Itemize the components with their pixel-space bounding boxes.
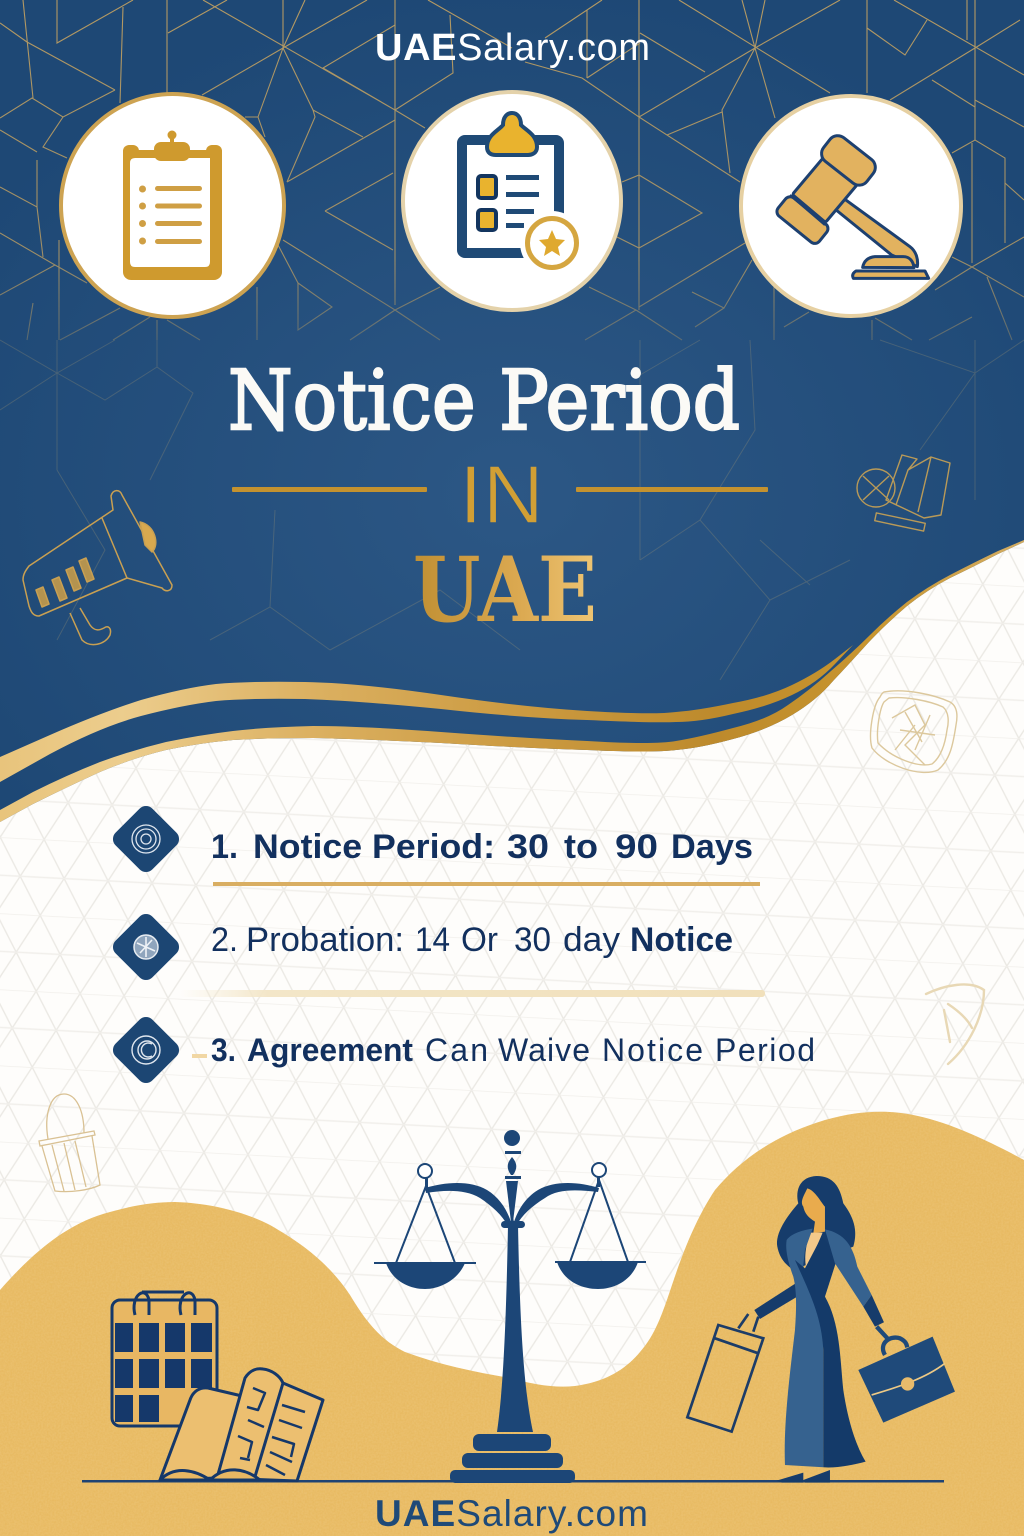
text: agreement: Period [715, 1032, 815, 1068]
right sleeve [825, 1229, 872, 1307]
text: probation: Notice [630, 921, 733, 959]
icon: diamond badge 3 [109, 1013, 183, 1087]
title word: UAE: UAE [413, 537, 597, 643]
icon: checklist clipboard with star badge [403, 92, 621, 310]
text: probation: 14 [415, 921, 450, 959]
right cuff [863, 1295, 884, 1327]
icon: balance scale [374, 1130, 646, 1483]
ground line [82, 1480, 944, 1482]
coat light panel [785, 1229, 823, 1467]
right shoe [777, 1473, 803, 1483]
text: probation: Probation: [246, 921, 404, 959]
top site name: UAESalary.com [375, 27, 650, 69]
icon: outline arc ghost [926, 984, 984, 1064]
bottom site name: UAESalary.com [375, 1493, 648, 1534]
text: agreement: 3. [211, 1032, 236, 1068]
icon: businesswoman with bags [687, 1176, 955, 1483]
faint lower line pattern [0, 340, 1024, 680]
text: probation: Or [461, 921, 498, 959]
text: agreement: Agreement [247, 1032, 413, 1068]
text: notice period: 30 [507, 828, 549, 866]
icon: outline megaphone [23, 491, 172, 645]
divider under item 1 [213, 882, 760, 886]
divider under item 2 [180, 990, 765, 997]
face [802, 1188, 825, 1233]
text: notice period: 1. [211, 828, 238, 866]
icon: gavel [741, 96, 961, 316]
left arm [754, 1282, 800, 1319]
lower gold ribbon [0, 540, 1024, 822]
dress dark panel [795, 1237, 866, 1467]
text: agreement: Waive [498, 1032, 590, 1068]
text: notice period: Days [671, 828, 753, 866]
divider right [576, 487, 768, 492]
icon: open book [160, 1369, 323, 1481]
list item 2 [109, 910, 733, 984]
text: agreement [211, 1032, 815, 1068]
icon: outline gavel ghost [857, 455, 950, 531]
hair [777, 1176, 855, 1270]
text: agreement: Notice [602, 1032, 703, 1068]
title: Notice Period [228, 354, 740, 449]
geometric gold line pattern [0, 0, 1024, 340]
text: probation [211, 921, 733, 959]
text: probation: 2. [211, 921, 238, 959]
list item 3 [109, 1013, 815, 1087]
text: agreement: Can [425, 1032, 488, 1068]
neckline [805, 1233, 823, 1270]
text: probation: day [563, 921, 620, 959]
small gold dash [192, 1054, 207, 1058]
left shoe [803, 1470, 830, 1483]
briefcase [858, 1327, 955, 1423]
panel: gold hills [0, 1100, 1024, 1536]
icon: outline lantern ghost [39, 1094, 100, 1192]
panel: navy header with wave [0, 0, 1024, 822]
icon: outline seal ghost [871, 691, 957, 772]
text: notice period: 90 [615, 828, 658, 866]
icon: diamond badge 2 [109, 910, 183, 984]
text: notice period [211, 828, 753, 866]
icon: diamond badge 1 [109, 802, 183, 876]
text: notice period: Notice Period: [253, 828, 495, 866]
list item 1 [109, 802, 753, 876]
outline shopping bag [687, 1314, 763, 1432]
icon: plain clipboard [61, 94, 284, 317]
text: probation: 30 [514, 921, 551, 959]
text: notice period: to [564, 828, 598, 866]
icon: calendar [112, 1292, 217, 1426]
divider left [232, 487, 427, 492]
upper gold ribbon [0, 645, 853, 782]
title word: IN: IN [459, 448, 544, 541]
